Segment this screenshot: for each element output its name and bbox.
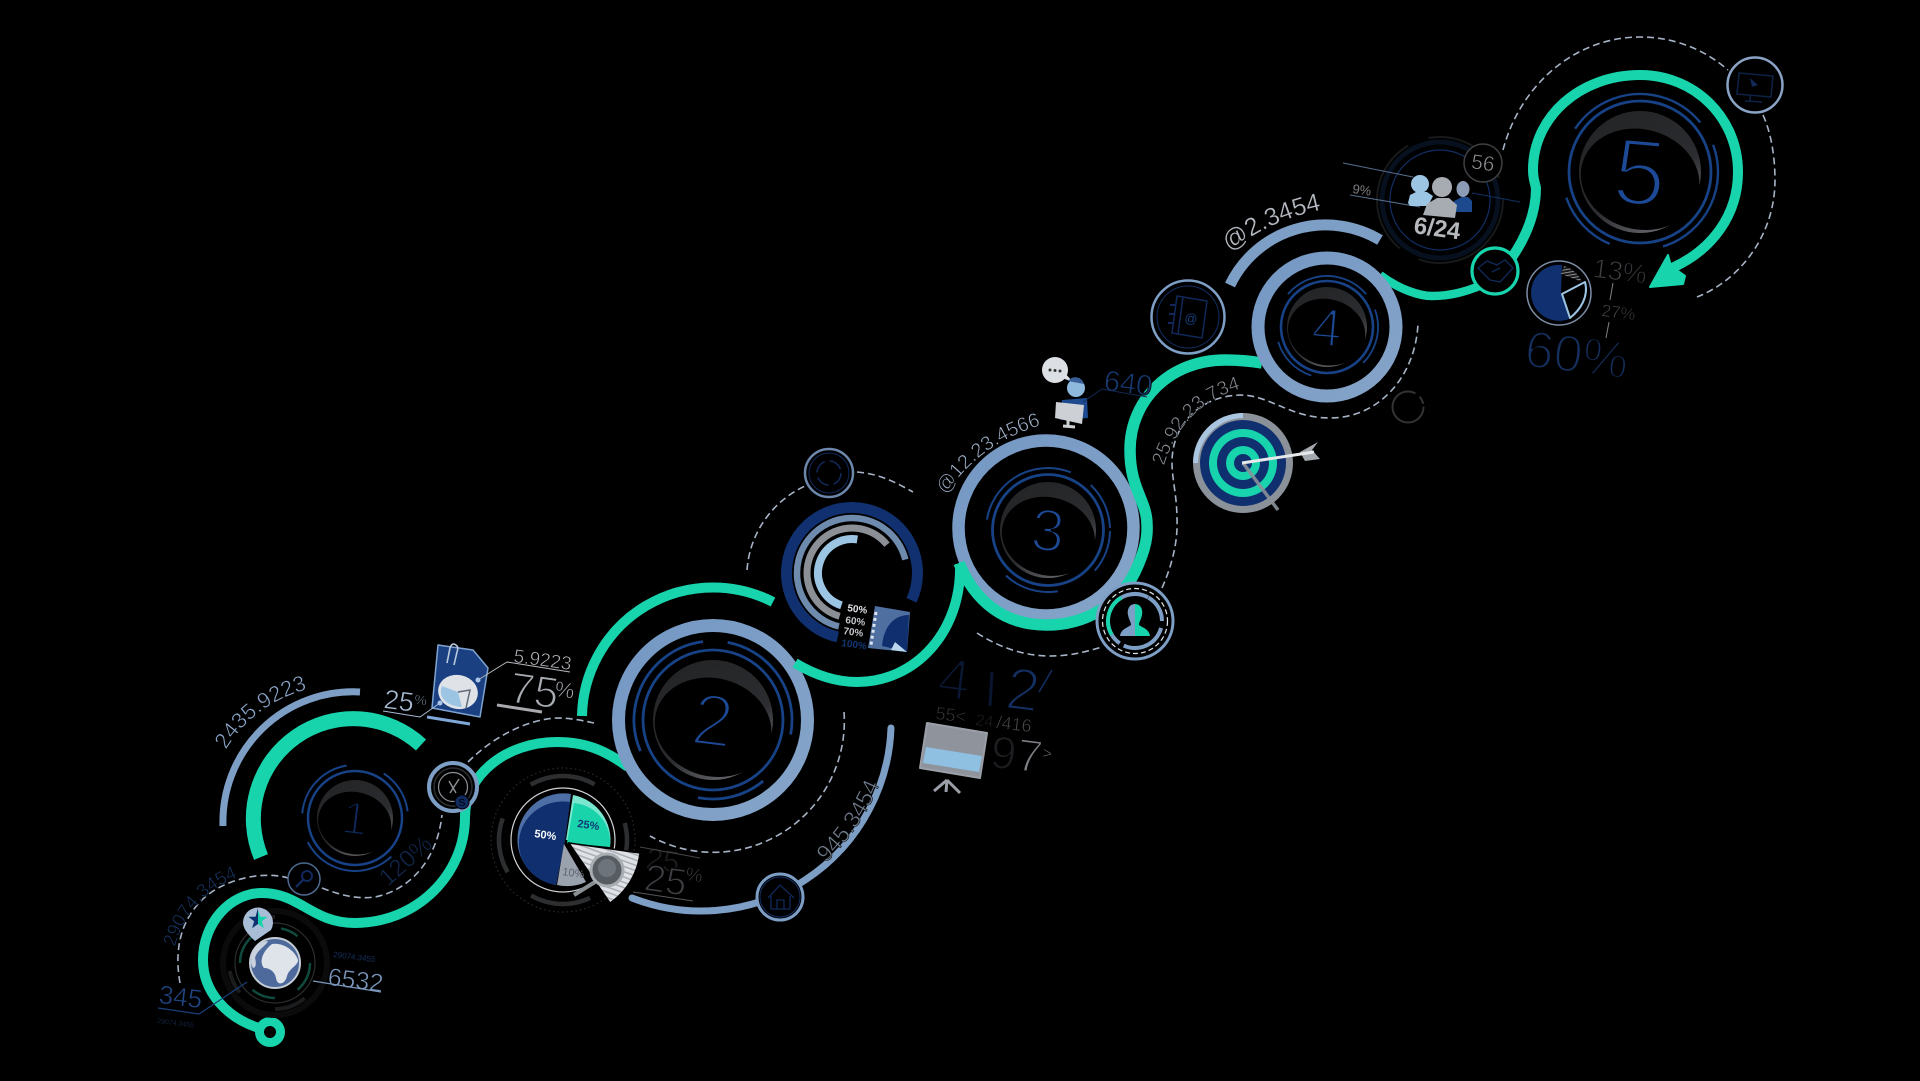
step 2 dial: 2 (687, 677, 738, 764)
teal path: circle 4 to handshake (1380, 275, 1482, 296)
callout: 4 2 and presentation board: 9 (988, 725, 1020, 780)
callout: 25%: % (414, 691, 428, 708)
step 4 dial: 4 (1309, 297, 1344, 359)
callout: 13% 27% 60%: 60% (1522, 320, 1632, 391)
step 1 outer arcs (223, 692, 421, 857)
badge: 56: 56 (1470, 150, 1496, 177)
icon: star map pin (243, 908, 273, 941)
callout: 4 2 and presentation board: 2 (1002, 654, 1044, 725)
icon: gauge node (429, 763, 477, 811)
callout: 6532 (313, 950, 385, 998)
main teal path: circle 3 to circle 4 (959, 360, 1262, 625)
step 1 dial: 1 (339, 791, 371, 845)
lower slate arc (632, 728, 891, 911)
icon: address book node (1152, 280, 1224, 354)
icon: small magnifier node (288, 863, 320, 895)
icon: person node (1097, 583, 1173, 659)
callout: 5.9223 and 75%: % (553, 676, 576, 704)
icon: address book node: @ (1184, 311, 1198, 326)
step 3 dial (958, 440, 1136, 618)
step 5 dial: 5 (1609, 118, 1671, 228)
callout: 345: 345 (157, 979, 204, 1014)
label 29074.3454: 29074.3454 (164, 866, 236, 946)
label @12.23.4566: @12.23.4566 (938, 413, 1039, 492)
icon: document with pie (432, 644, 488, 717)
radial bar chart: 60% (845, 615, 866, 629)
icon: handshake node (1472, 248, 1518, 294)
icon: target with arrow (1193, 413, 1320, 513)
callout: 6532: 29074.3455 (333, 950, 376, 964)
callout: 4 2 and presentation board: 7 (1014, 728, 1046, 783)
step 2 dial (602, 609, 824, 831)
pie chart with magnifier (485, 762, 641, 918)
callout: 640: 640 (1102, 365, 1154, 403)
callout: 345: 29074.3455 (157, 1018, 194, 1030)
callout: 13% 27% 60%: 27% (1601, 301, 1637, 324)
icon: person at monitor with chat bubble (1042, 357, 1088, 427)
callout: 4 2 and presentation board (920, 645, 1053, 793)
callout: pie 25% (633, 842, 704, 905)
small pie chart (1527, 261, 1591, 325)
icon: gauge node: S (459, 798, 466, 809)
callout: 25%: 25 (382, 684, 416, 718)
label @2.3454: @2.3454 (1225, 194, 1320, 250)
callout: 4 2 and presentation board: 4 (934, 645, 974, 714)
step 4 arc (1230, 225, 1380, 285)
team group with 6/24: 6/24 (1412, 212, 1463, 246)
team group with 6/24 (1343, 137, 1520, 263)
main teal path: circle 2 to circle 3 (795, 564, 960, 682)
callout: 13% 27% 60%: 13% (1591, 253, 1649, 290)
radial bar chart: 50% (847, 603, 868, 617)
pie chart with magnifier: 50% (534, 828, 557, 843)
icon: monitor node (1728, 58, 1782, 112)
step 4 dial (1258, 258, 1396, 396)
badge: 56 (1464, 144, 1502, 182)
callout: 345 (157, 979, 247, 1030)
main teal path with arrow (1500, 75, 1738, 287)
icon: globe with rings (210, 898, 340, 1028)
small gray loader ring (1392, 392, 1424, 422)
icon: refresh node (805, 449, 853, 497)
callout: pie 25%: 25 (644, 842, 682, 880)
label 25.92.23.734: 25.92.23.734 (1152, 377, 1239, 464)
icon: house node (757, 874, 803, 920)
pie chart with magnifier: 25% (577, 818, 600, 833)
team group with 6/24: 9% (1352, 181, 1373, 199)
callout: pie 25%: 25 (642, 857, 689, 905)
callout: 5.9223 and 75%: 5.9223 (512, 646, 573, 675)
step 1 dial (280, 743, 430, 893)
main teal arc over circle 2 (582, 587, 773, 716)
step 3 dial: 3 (1028, 496, 1068, 565)
callout: pie 25%: % (684, 864, 704, 887)
callout: 25% (382, 684, 470, 724)
main teal path: start to circle 2 (203, 742, 628, 1042)
radial bar chart: 100% (841, 638, 868, 653)
callout: 4 2 and presentation board: 24 (975, 712, 994, 731)
dashed connector lines (178, 37, 1775, 983)
label 945.3454: 945.3454 (818, 781, 879, 861)
label 120%: 120% (374, 830, 438, 891)
callout: 4 2 and presentation board: 55< (935, 703, 967, 727)
callout: 5.9223 and 75%: 75 (507, 663, 562, 719)
pie chart with magnifier: 10% (562, 866, 585, 881)
callout: 6532: 6532 (326, 963, 385, 998)
radial bar chart: 70% (843, 626, 864, 640)
callout: 4 2 and presentation board: > (1042, 745, 1053, 763)
callout: 4 2 and presentation board: /416 (996, 712, 1033, 736)
step 5 dial (1540, 72, 1740, 272)
label 2435.9223: 2435.9223 (216, 676, 306, 749)
callout: 13% 27% 60% (1522, 253, 1649, 391)
radial bar chart (773, 494, 931, 653)
callout: 5.9223 and 75% (476, 646, 576, 719)
